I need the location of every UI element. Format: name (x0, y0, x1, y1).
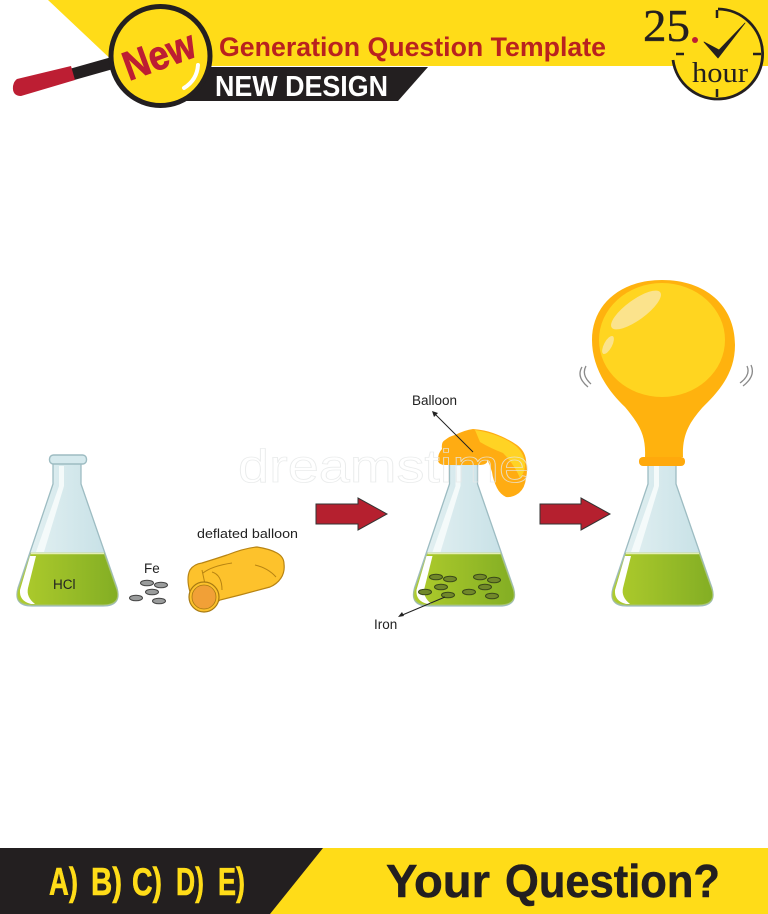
yellow header band (48, 0, 768, 66)
arrow: step 1 to 2 (316, 498, 387, 530)
flask 2: with iron and balloon (413, 429, 527, 606)
footer bar (0, 848, 768, 914)
flask lip (50, 455, 86, 464)
answer options: C) (132, 861, 162, 904)
clock badge: 25 hour (643, 1, 763, 99)
header banner (13, 0, 768, 106)
label: Iron: Iron (374, 617, 397, 632)
label: Iron (374, 597, 445, 632)
flask 1: HCl (17, 455, 118, 606)
answer options: D) (176, 861, 204, 904)
coins (130, 580, 168, 604)
clock badge: 25 hour: hour (692, 58, 749, 89)
watermark: dreamstime (238, 440, 530, 492)
flask 3: inflated balloon (580, 280, 752, 606)
icon: magnifying glass (13, 6, 210, 106)
answer options (49, 861, 245, 904)
ribbon: new design (175, 67, 428, 103)
iron coins in acid (418, 574, 500, 599)
balloon body (188, 547, 284, 606)
label: deflated balloon: deflated balloon (197, 526, 298, 541)
title: Generation Question Template (219, 32, 606, 62)
question text: Your (386, 855, 490, 907)
limp balloon on flask (438, 429, 527, 497)
deflated balloon (188, 526, 298, 612)
iron pieces: Fe (130, 561, 168, 604)
label: Fe: Fe (144, 561, 160, 576)
icon: magnifying glass: New (116, 21, 202, 89)
balloon mouth (189, 582, 219, 612)
ribbon: new design: NEW DESIGN (215, 71, 388, 103)
label: HCl: HCl (53, 577, 76, 592)
inflated balloon (592, 280, 735, 466)
answer panel (0, 848, 323, 914)
label: Balloon: Balloon (412, 393, 457, 408)
motion marks (580, 365, 752, 387)
answer options: A) (49, 861, 78, 904)
label: Balloon (412, 393, 473, 452)
answer options: E) (218, 861, 245, 904)
question text: Question? (505, 855, 720, 907)
clock badge: 25 hour: 25 (643, 1, 690, 51)
answer options: B) (91, 861, 122, 904)
question text (386, 855, 720, 907)
arrow: step 2 to 3 (540, 498, 610, 530)
